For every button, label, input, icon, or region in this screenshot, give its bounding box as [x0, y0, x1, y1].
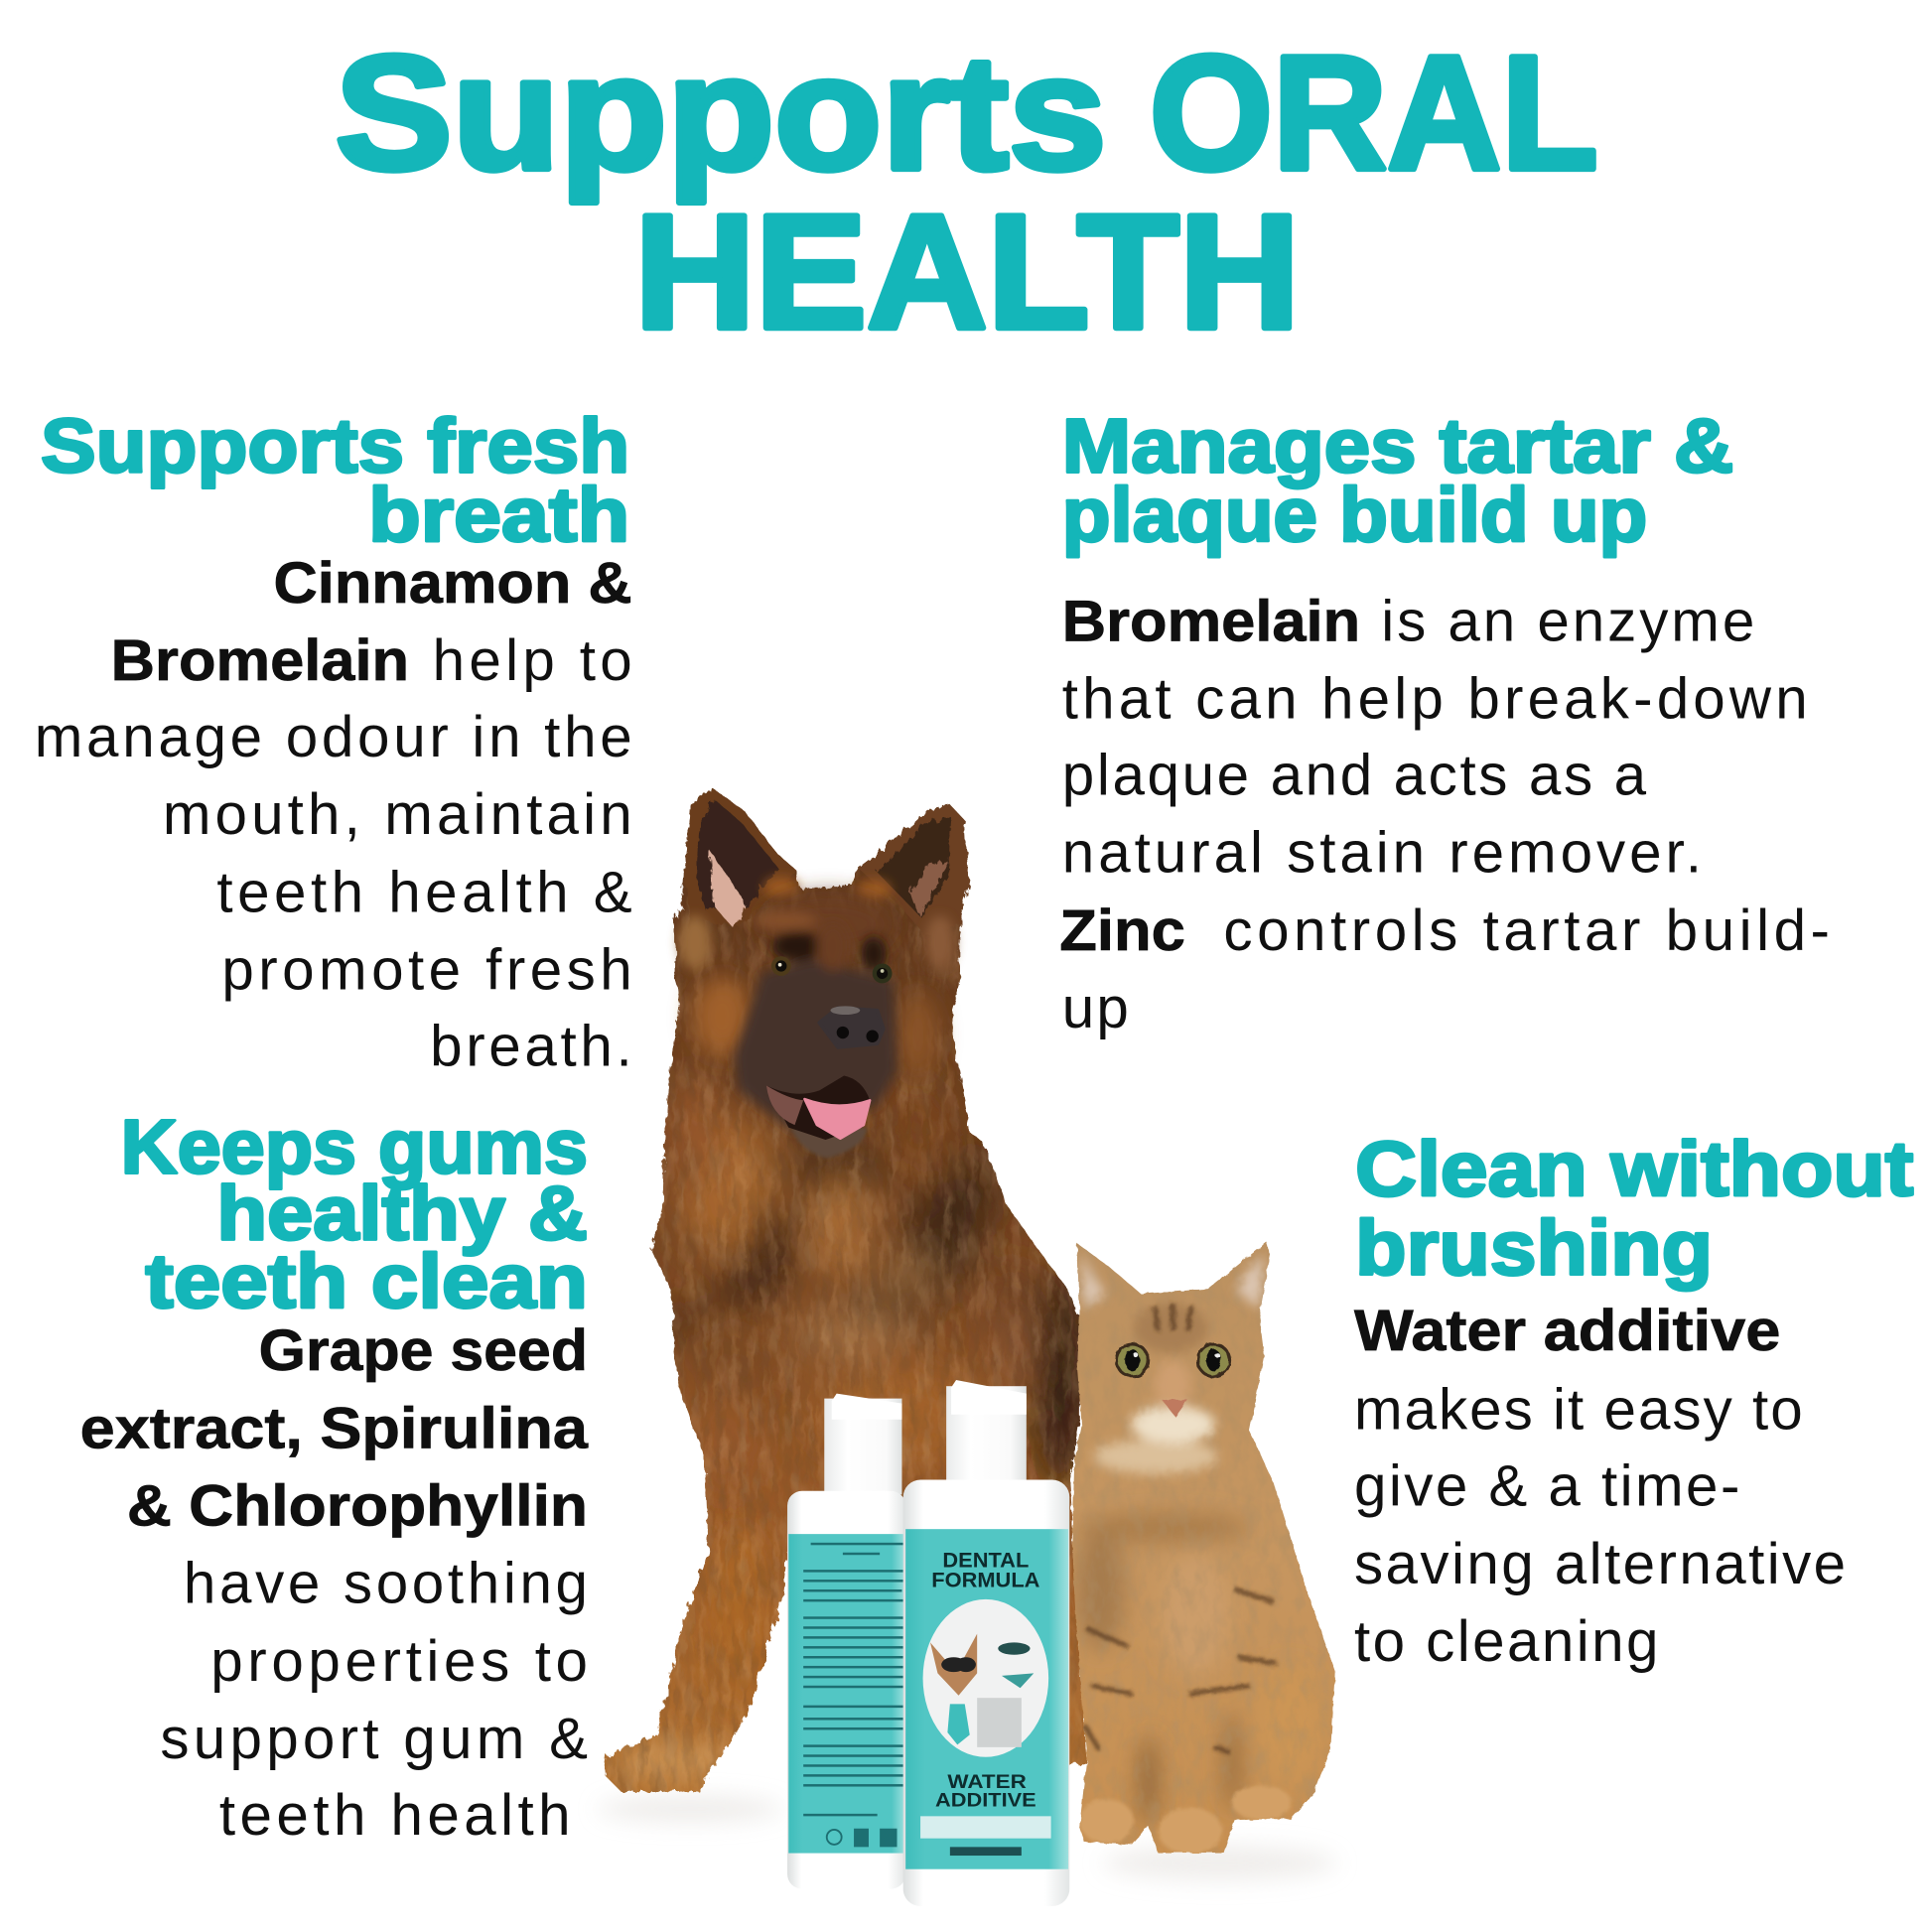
bottle label subheading: ADDITIVE — [935, 1789, 1036, 1811]
text block: clean body: makes it easy to — [1354, 1378, 1803, 1443]
text block: fresh breath body: breath. — [430, 1015, 632, 1079]
text block: gums body: & Chlorophyllin — [127, 1473, 588, 1538]
text block: gums body: teeth health — [219, 1783, 571, 1848]
panel: supports fresh breath — [35, 403, 632, 1079]
bottle label heading: DENTAL — [942, 1550, 1029, 1573]
heading: supports fresh breath: breath — [368, 473, 629, 558]
text block: fresh breath body: promote fresh — [221, 938, 632, 1003]
heading: clean without brushing: Clean without — [1355, 1125, 1913, 1212]
mouth — [766, 1075, 870, 1140]
text block: fresh breath body: help to — [433, 628, 632, 693]
cat nose — [1162, 1400, 1187, 1417]
dog face — [679, 878, 955, 1159]
fur colour regions — [665, 1072, 1082, 1491]
text block: fresh breath body: Bromelain — [111, 628, 409, 693]
dog eyes — [771, 956, 791, 976]
text block: fresh breath body: teeth health & — [216, 860, 632, 924]
text block: gums body: support gum & — [160, 1707, 588, 1771]
heading: keeps gums healthy — [121, 1104, 588, 1324]
chin — [791, 1128, 868, 1159]
text block: tartar body: Bromelain — [1062, 589, 1360, 653]
bottle label subheading: WATER — [947, 1771, 1027, 1793]
text block: clean body — [1354, 1299, 1846, 1674]
text block: gums body: properties to — [210, 1629, 588, 1694]
text block: tartar body: plaque and acts as a — [1062, 743, 1647, 807]
panel: keeps gums healthy — [80, 1104, 589, 1848]
title: ORAL — [1150, 22, 1598, 204]
illustration: tabby cat — [1059, 1232, 1343, 1861]
heading: manages tartar and plaque: Manages tartar & — [1062, 403, 1733, 488]
text block: tartar body: Zinc — [1059, 898, 1185, 963]
text block: gums body: have soothing — [184, 1552, 588, 1616]
text block: gums body: extract, Spirulina — [80, 1396, 589, 1460]
text block: clean body: to cleaning — [1354, 1609, 1658, 1674]
text block: gums body — [80, 1318, 589, 1848]
text block: tartar body: natural stain remover. — [1062, 821, 1702, 886]
panel: clean without brushing — [1354, 1125, 1913, 1674]
cat eyes — [1116, 1344, 1149, 1376]
text block: fresh breath body — [35, 551, 632, 1079]
text block: clean body: saving alternative — [1354, 1532, 1846, 1596]
heading: manages tartar and plaque: plaque build up — [1062, 473, 1647, 558]
text block: tartar body — [1059, 589, 1830, 1040]
heading: clean without brushing — [1355, 1125, 1913, 1291]
title — [336, 22, 1598, 362]
text block: tartar body: that can help break-down — [1062, 667, 1808, 732]
text block: clean body: give & a time- — [1354, 1454, 1739, 1519]
product: back bottle — [787, 1394, 905, 1889]
heading: keeps gums healthy: Keeps gums — [121, 1104, 588, 1189]
text block: fresh breath body: mouth, maintain — [163, 782, 632, 847]
bottle label heading — [931, 1550, 1039, 1591]
text block: tartar body: is an enzyme — [1381, 589, 1754, 653]
illustration: german shepherd dog — [604, 788, 1088, 1793]
title: HEALTH — [634, 181, 1300, 362]
text block: clean body: Water additive — [1354, 1299, 1780, 1363]
heading: supports fresh breath: Supports fresh — [41, 403, 629, 488]
heading: supports fresh breath — [41, 403, 629, 558]
bottle label heading: FORMULA — [931, 1569, 1039, 1591]
heading: keeps gums healthy: teeth clean — [145, 1239, 588, 1324]
text block: fresh breath body: Cinnamon & — [274, 551, 632, 616]
back label fine print — [803, 1543, 903, 1847]
heading: keeps gums healthy: healthy & — [216, 1172, 588, 1257]
text block: tartar body: up — [1062, 976, 1129, 1040]
ears — [684, 787, 968, 936]
text block: gums body: Grape seed — [259, 1318, 588, 1383]
bottle pet portrait — [923, 1599, 1048, 1757]
heading: clean without brushing: brushing — [1355, 1203, 1713, 1291]
text block: tartar body: controls tartar build- — [1223, 898, 1830, 963]
panel: manages tartar and plaque — [1059, 403, 1830, 1040]
product: front bottle — [903, 1380, 1069, 1906]
tongue — [804, 1099, 870, 1139]
bottle label subheading — [935, 1771, 1036, 1811]
heading: manages tartar and plaque — [1062, 403, 1733, 558]
text block: fresh breath body: manage odour in the — [35, 705, 632, 769]
nose — [819, 1008, 884, 1047]
floor shadow — [598, 1796, 1337, 1880]
title: Supports — [336, 22, 1106, 204]
